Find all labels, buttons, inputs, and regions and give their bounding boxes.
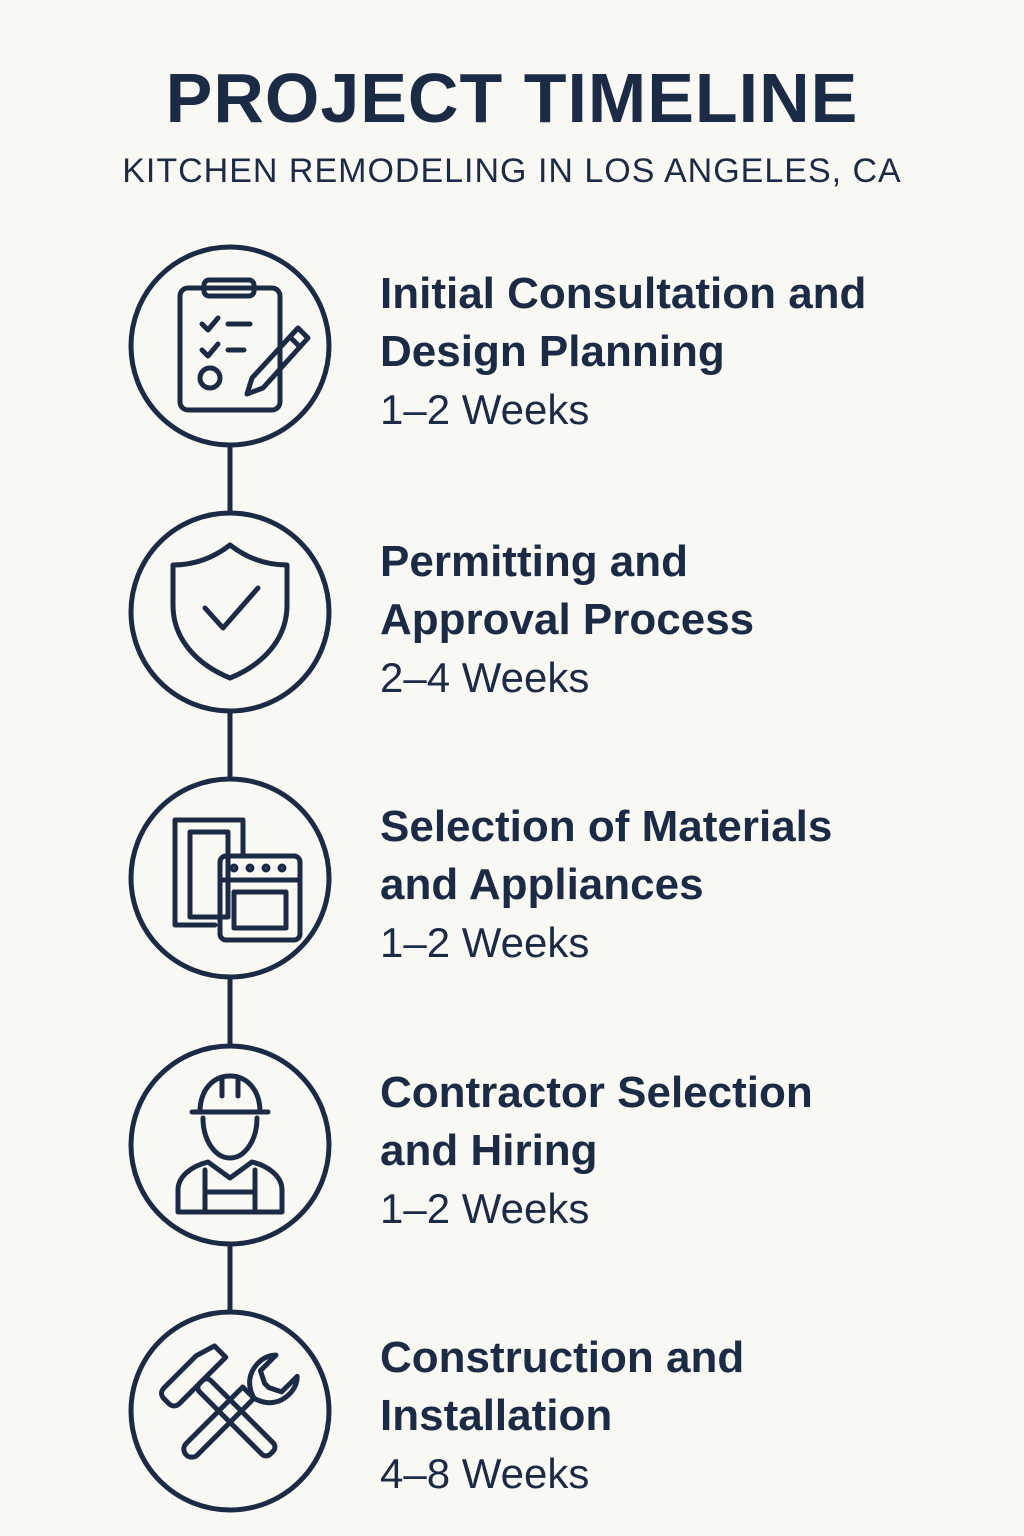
step 3 text: Selection of Materials: [380, 802, 832, 851]
icon: clipboard: [131, 247, 329, 445]
step 5 text: Construction and: [380, 1333, 744, 1382]
icon: shield: [131, 513, 329, 711]
step 3 text: [380, 802, 832, 966]
step 4 text: Contractor Selection: [380, 1068, 813, 1117]
step 2 text: Approval Process: [380, 595, 754, 644]
step 3 text: 1–2 Weeks: [380, 919, 589, 966]
step 2 text: 2–4 Weeks: [380, 654, 589, 701]
connector line: [228, 446, 232, 1311]
step 4 text: [380, 1068, 813, 1232]
icon: tools: [131, 1312, 329, 1510]
subtitle: KITCHEN REMODELING IN LOS ANGELES, CA: [122, 152, 902, 190]
icon: worker: [131, 1046, 329, 1244]
step 4 text: 1–2 Weeks: [380, 1185, 589, 1232]
step 1 text: [380, 269, 866, 433]
title: PROJECT TIMELINE: [166, 59, 858, 137]
step 2 text: [380, 537, 754, 701]
step 1 text: Initial Consultation and: [380, 269, 866, 318]
icon: materials and appliances: [131, 779, 329, 977]
step 1 text: 1–2 Weeks: [380, 386, 589, 433]
step 5 text: [380, 1333, 744, 1497]
step 2 text: Permitting and: [380, 537, 688, 586]
step 3 text: and Appliances: [380, 860, 704, 909]
step 5 text: 4–8 Weeks: [380, 1450, 589, 1497]
step 5 text: Installation: [380, 1391, 612, 1440]
step 1 text: Design Planning: [380, 327, 725, 376]
step 4 text: and Hiring: [380, 1126, 598, 1175]
